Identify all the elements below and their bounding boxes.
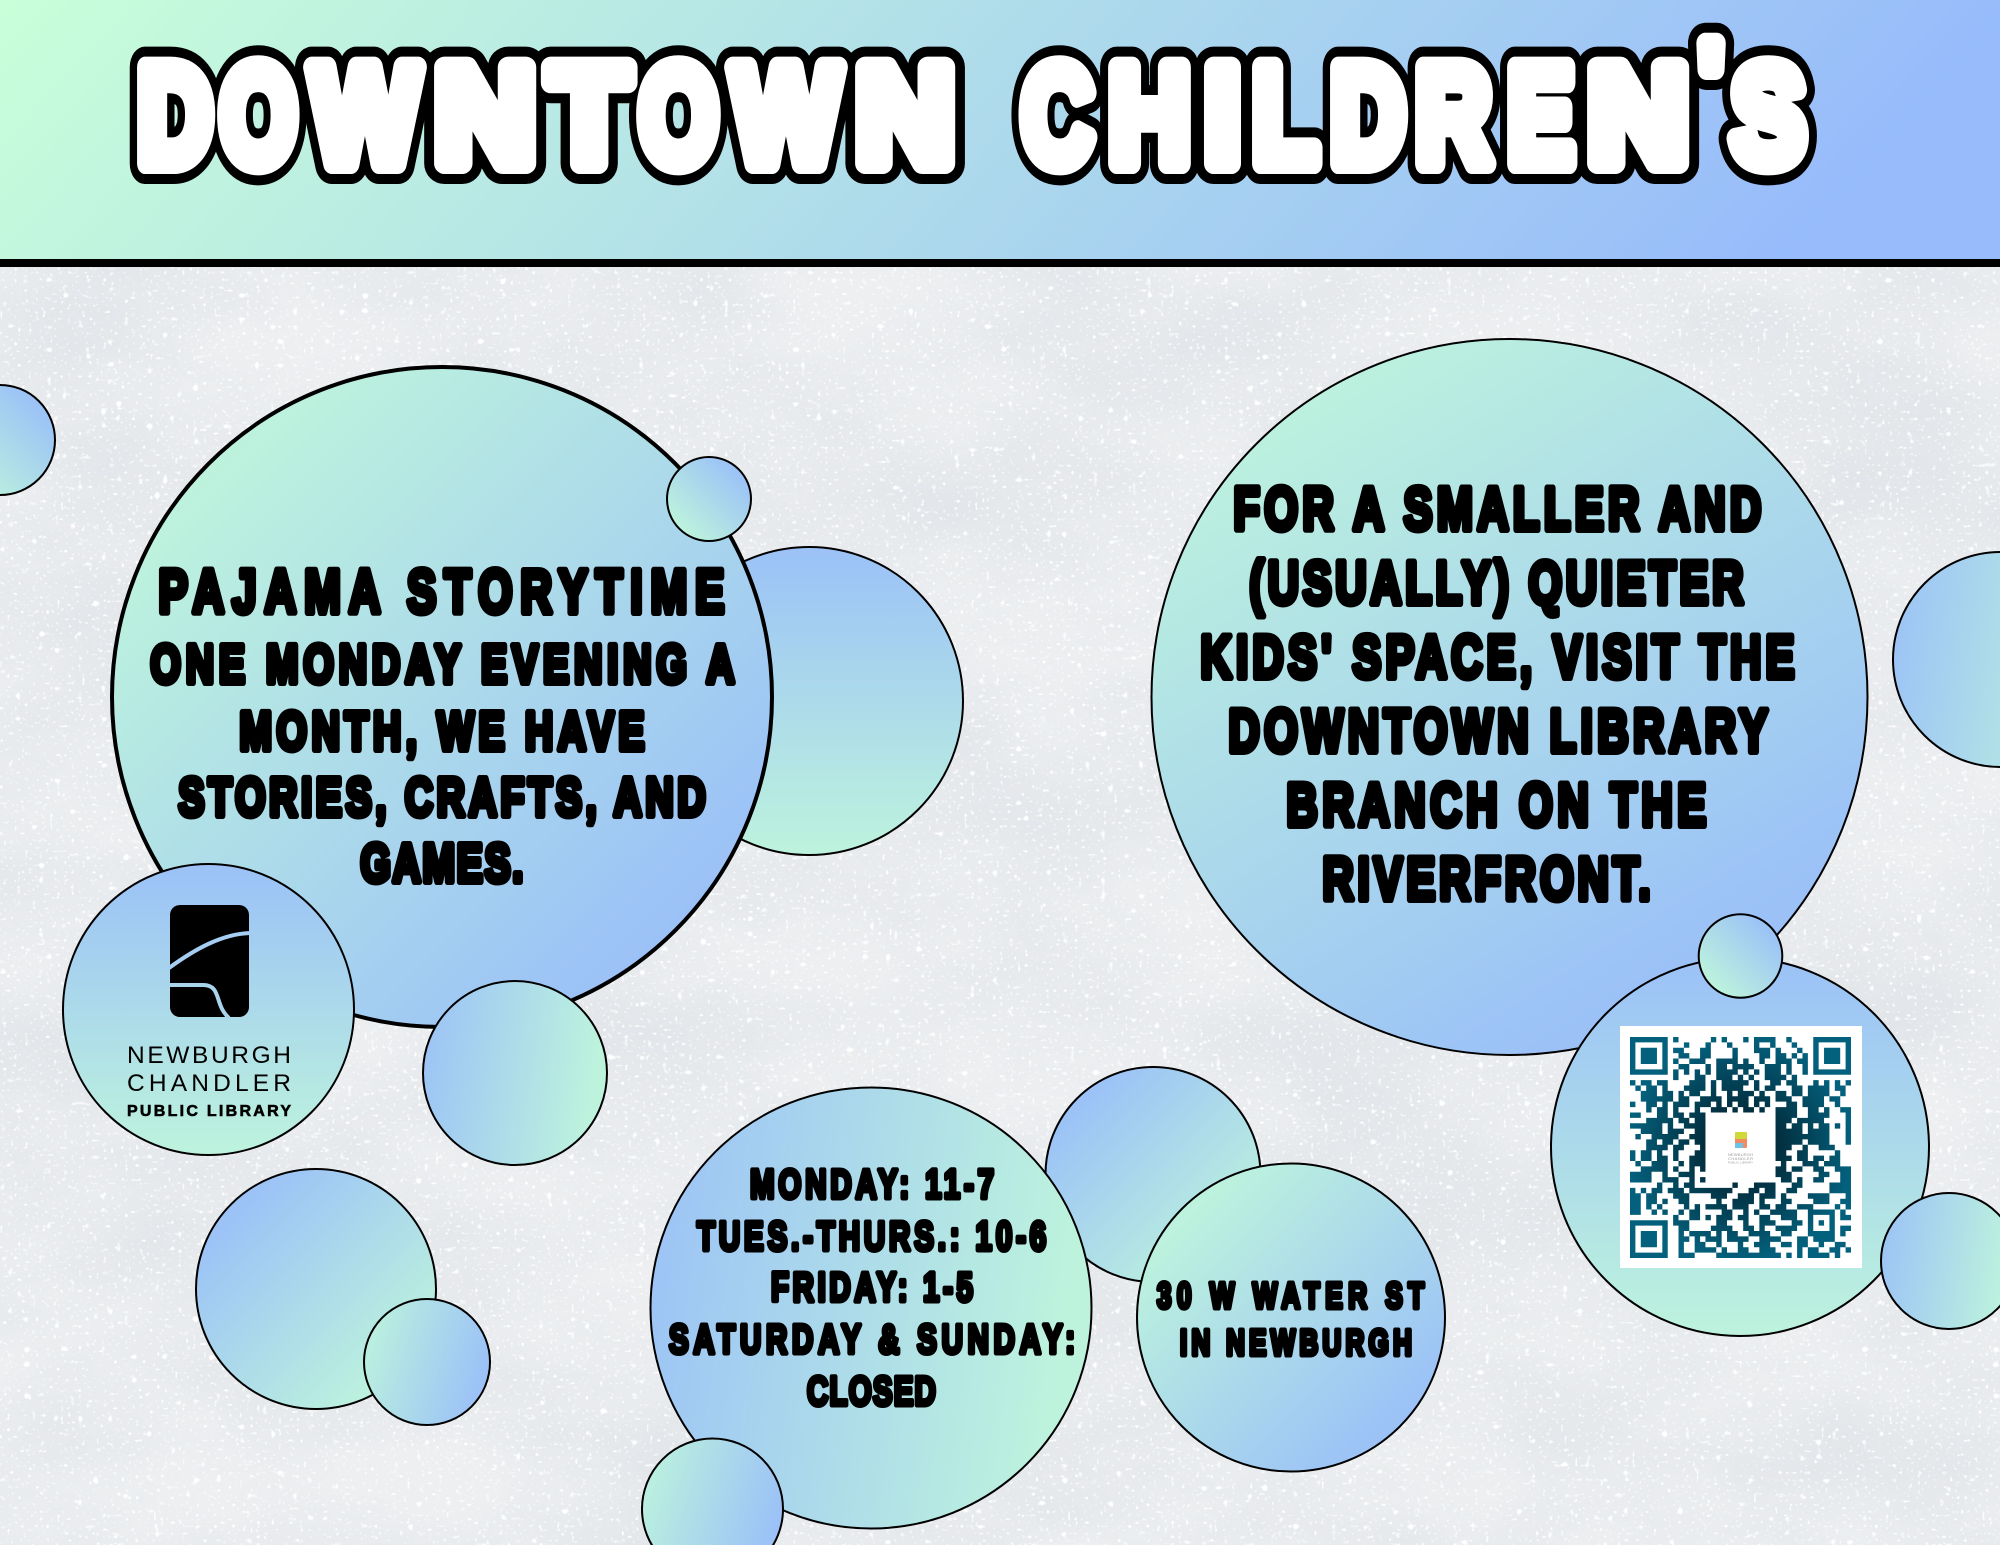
title: ' (1700, 22, 1722, 138)
hours text: MONDAY: 11-7 (750, 1161, 994, 1207)
title: W (732, 36, 840, 194)
QR code (1620, 1026, 1862, 1268)
title: ' (1700, 22, 1722, 138)
decorative bubble: lower left large (196, 1169, 436, 1409)
logo wordmark: PUBLIC LIBRARY (127, 1103, 291, 1120)
decorative bubble: lower left small (364, 1299, 490, 1425)
branch message text: DOWNTOWN LIBRARY (1228, 699, 1768, 765)
title: H (1109, 36, 1190, 194)
title: D (1331, 36, 1405, 194)
title: O (640, 36, 718, 194)
title: S (1732, 36, 1805, 194)
title: L (1253, 36, 1318, 194)
storytime description: ONE MONDAY EVENING A (150, 633, 734, 694)
title: T (549, 36, 629, 194)
title: W (312, 36, 418, 194)
QR centre logo: NEWBURGH (1728, 1152, 1753, 1157)
panel: address (1137, 1164, 1445, 1472)
decorative bubble: far left edge (0, 385, 55, 495)
decorative bubble: on storytime top right (667, 457, 751, 541)
storytime description: MONTH, WE HAVE (240, 700, 645, 761)
title: D (1331, 36, 1405, 194)
title: N (856, 36, 954, 194)
title: H (1109, 36, 1190, 194)
branch message text: (USUALLY) QUIETER (1250, 551, 1743, 617)
title: N (856, 36, 954, 194)
title: I (1205, 36, 1240, 194)
storytime description: GAMES. (360, 832, 523, 893)
branch message text: KIDS' SPACE, VISIT THE (1200, 625, 1795, 691)
storytime description (150, 633, 734, 893)
branch message text: RIVERFRONT. (1322, 847, 1650, 913)
hours text: TUES.-THURS.: 10-6 (697, 1213, 1046, 1259)
decorative bubble: lower right of storytime (423, 981, 607, 1165)
QR centre logo: PUBLIC LIBRARY (1728, 1160, 1753, 1164)
title (138, 22, 1805, 194)
QR centre logo: CHANDLER (1728, 1156, 1753, 1161)
title: O (220, 36, 296, 194)
QR centre logo (1728, 1132, 1753, 1164)
address text (1157, 1276, 1424, 1363)
title: C (1022, 36, 1093, 194)
panel: downtown branch message (1152, 339, 1868, 1055)
branch message text: FOR A SMALLER AND (1234, 477, 1761, 543)
title: T (549, 36, 629, 194)
title: O (640, 36, 718, 194)
title: C (1022, 36, 1093, 194)
title: N (1588, 36, 1688, 194)
logo wordmark: CHANDLER (127, 1070, 291, 1097)
title: E (1508, 36, 1574, 194)
decorative bubble: behind hours (1046, 1067, 1260, 1282)
branch message text (1200, 477, 1794, 913)
hours text: CLOSED (807, 1368, 936, 1414)
title: S (1732, 36, 1805, 194)
title: N (435, 36, 535, 194)
panel: opening hours (650, 1088, 1092, 1528)
decorative bubble: right edge (1893, 552, 2000, 767)
title: R (1416, 36, 1491, 194)
decorative bubble: right of QR (1881, 1193, 2000, 1329)
heading: pajama storytime: PAJAMA STORYTIME (158, 559, 724, 626)
storytime description: STORIES, CRAFTS, AND (178, 766, 706, 827)
icon: library mark (169, 905, 250, 1018)
title: D (138, 36, 212, 194)
panel: QR code bubble (1551, 958, 1929, 1336)
title: O (220, 36, 296, 194)
title: W (732, 36, 840, 194)
logo wordmark: NEWBURGH (127, 1042, 291, 1069)
title: R (1416, 36, 1491, 194)
hours text: SATURDAY & SUNDAY: (669, 1316, 1075, 1362)
hours text: FRIDAY: 1-5 (771, 1264, 973, 1310)
decorative bubble: behind storytime (655, 547, 963, 855)
title: D (138, 36, 212, 194)
title: E (1508, 36, 1574, 194)
panel: pajama storytime (112, 367, 772, 1027)
title: N (1588, 36, 1688, 194)
decorative bubble: above QR (1699, 914, 1782, 998)
address text: IN NEWBURGH (1180, 1323, 1412, 1363)
logo wordmark (127, 1042, 291, 1120)
panel: library logo (63, 864, 354, 1155)
title: W (312, 36, 418, 194)
header banner (0, 0, 2000, 267)
decorative bubble: bottom of hours (642, 1438, 783, 1545)
title: N (435, 36, 535, 194)
address text: 30 W WATER ST (1157, 1276, 1424, 1316)
title: L (1253, 36, 1318, 194)
hours text (669, 1161, 1075, 1414)
branch message text: BRANCH ON THE (1286, 773, 1706, 839)
title: I (1205, 36, 1240, 194)
